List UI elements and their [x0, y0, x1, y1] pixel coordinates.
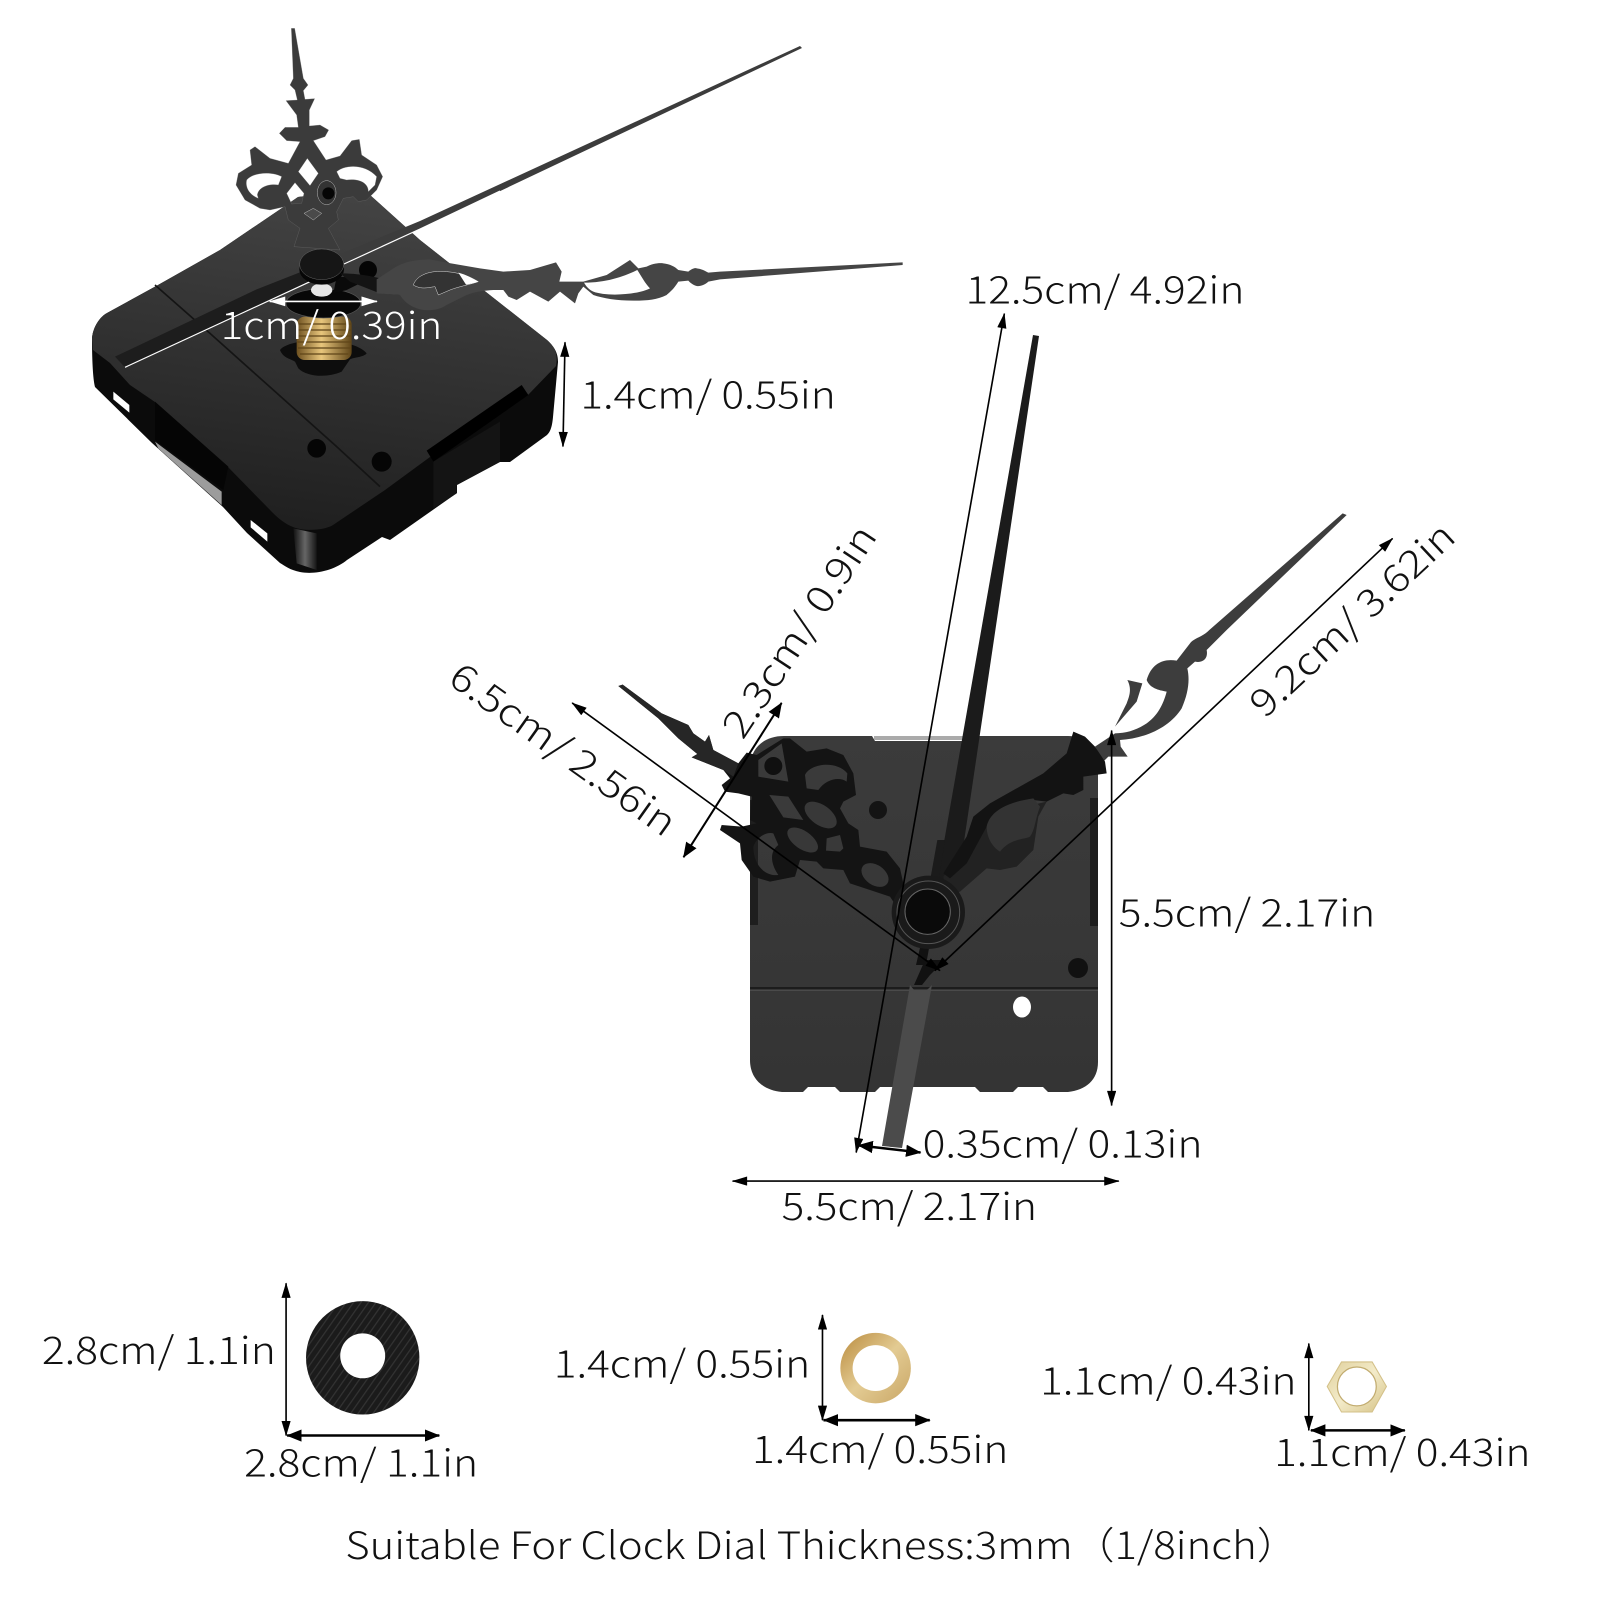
part: brass washer [840, 1333, 911, 1403]
ornate hour hand [236, 28, 383, 250]
battery recess [155, 402, 228, 490]
dark shaft below hub [916, 933, 932, 965]
eye hole [317, 181, 336, 205]
recess [433, 422, 500, 508]
ring highlight [897, 881, 960, 944]
arrow: 6.5cm hour hand [572, 703, 940, 971]
hand inner cut-out [413, 271, 478, 295]
ornate minute hand [943, 513, 1347, 897]
seconds hand with tail [882, 335, 1039, 1148]
screw hole [307, 439, 326, 458]
slot [427, 385, 528, 462]
thin minute hand [338, 46, 802, 263]
arrow: brass washer width [823, 1419, 930, 1421]
front view: clock movement [618, 335, 1347, 1148]
label: housing width: 5.5cm/ 2.17in [782, 1176, 1037, 1231]
arrow: 0.35cm tail width [858, 1145, 921, 1152]
black arm [333, 277, 370, 293]
label: 12.5cm: 12.5cm/ 4.92in [966, 259, 1244, 314]
cut-out background gap [458, 273, 478, 285]
oval cut-out 3 [857, 858, 893, 892]
leaf cut-out [987, 798, 1040, 852]
hole near seam [372, 452, 392, 472]
part: black rubber washer [306, 1301, 419, 1415]
arrow: nut width [1311, 1429, 1405, 1432]
arrow: brass washer height [821, 1315, 823, 1420]
label: 1.4cm depth: 1.4cm/ 0.55in [580, 365, 836, 420]
part: hex nut [1327, 1362, 1386, 1412]
hole near hub [359, 261, 377, 279]
arrow: housing width [733, 1180, 1119, 1182]
blade and knobs [1095, 513, 1347, 762]
label: 9.2cm: 9.2cm/ 3.62in [1235, 507, 1465, 727]
arrow: housing height [1111, 731, 1113, 1105]
label: housing height: 5.5cm/ 2.17in [1119, 883, 1375, 938]
label: 6.5cm: 6.5cm/ 2.56in [440, 647, 690, 847]
footer note: Suitable For Clock Dial Thickness:3mm（1/8inch） [345, 1515, 1299, 1570]
ornate minute hand [340, 259, 903, 310]
corner highlight [293, 528, 317, 570]
arrow: nut height [1308, 1344, 1310, 1430]
label: nut width: 1.1cm/ 0.43in [1274, 1422, 1531, 1477]
eye hole center [322, 187, 334, 199]
arrow: washer width [287, 1434, 439, 1437]
arrow: washer height [285, 1283, 287, 1436]
arm to hub [340, 273, 400, 295]
contact window right [251, 520, 267, 542]
label: 0.35cm: 0.35cm/ 0.13in [923, 1114, 1203, 1169]
arrow: 9.2cm minute hand [935, 538, 1393, 971]
right edge details [307, 385, 528, 508]
arrow: 1.4cm depth [563, 342, 565, 446]
label: brass washer height: 1.4cm/ 0.55in [554, 1333, 810, 1388]
label: washer width: 2.8cm/ 1.1in [244, 1432, 478, 1487]
center hub [892, 840, 965, 965]
label: washer height: 2.8cm/ 1.1in [42, 1320, 276, 1375]
label: 2.3cm: 2.3cm/ 0.9in [706, 512, 887, 747]
flange blade [1115, 680, 1142, 727]
contact window left [113, 392, 129, 413]
tail highlight [125, 282, 310, 367]
second hand tail [115, 268, 313, 367]
arrow: 2.3cm hand width [684, 703, 782, 857]
screw hole in hand [764, 757, 782, 775]
small diamond hole [304, 208, 322, 220]
label: brass washer width: 1.4cm/ 0.55in [752, 1419, 1008, 1474]
white shaft [311, 283, 332, 297]
label: minute hand 1cm: 1cm/ 0.39in [221, 295, 442, 350]
base flange [280, 340, 367, 376]
outer ring [892, 876, 965, 949]
top view: clock movement [92, 28, 903, 573]
arrow: 12.5cm seconds hand [856, 314, 1004, 1152]
surface seam [155, 285, 380, 487]
collar [286, 289, 361, 318]
dark shaft of second hand [928, 840, 945, 890]
oval cut-out 2 [783, 822, 822, 858]
minute hand highlight [344, 191, 500, 264]
oval cut-out 1 [800, 796, 841, 834]
cap top [300, 249, 344, 280]
movement body [92, 193, 558, 573]
housing holes [869, 801, 1088, 1018]
arrow: 1cm width [270, 300, 377, 302]
hub cap [299, 249, 344, 285]
lower leaf [943, 802, 1047, 897]
cap side [299, 254, 344, 285]
hand tip tone [618, 685, 738, 777]
threaded brass stem [297, 317, 352, 360]
movement housing [750, 736, 1098, 1092]
hub cap [905, 889, 950, 934]
grey battery strip [155, 442, 222, 505]
ornate hour hand [618, 685, 903, 907]
lower-left edge details [113, 268, 380, 570]
stem, shaft and collar [280, 277, 370, 376]
label: nut height: 1.1cm/ 0.43in [1040, 1351, 1297, 1406]
upper leaf [943, 732, 1107, 878]
